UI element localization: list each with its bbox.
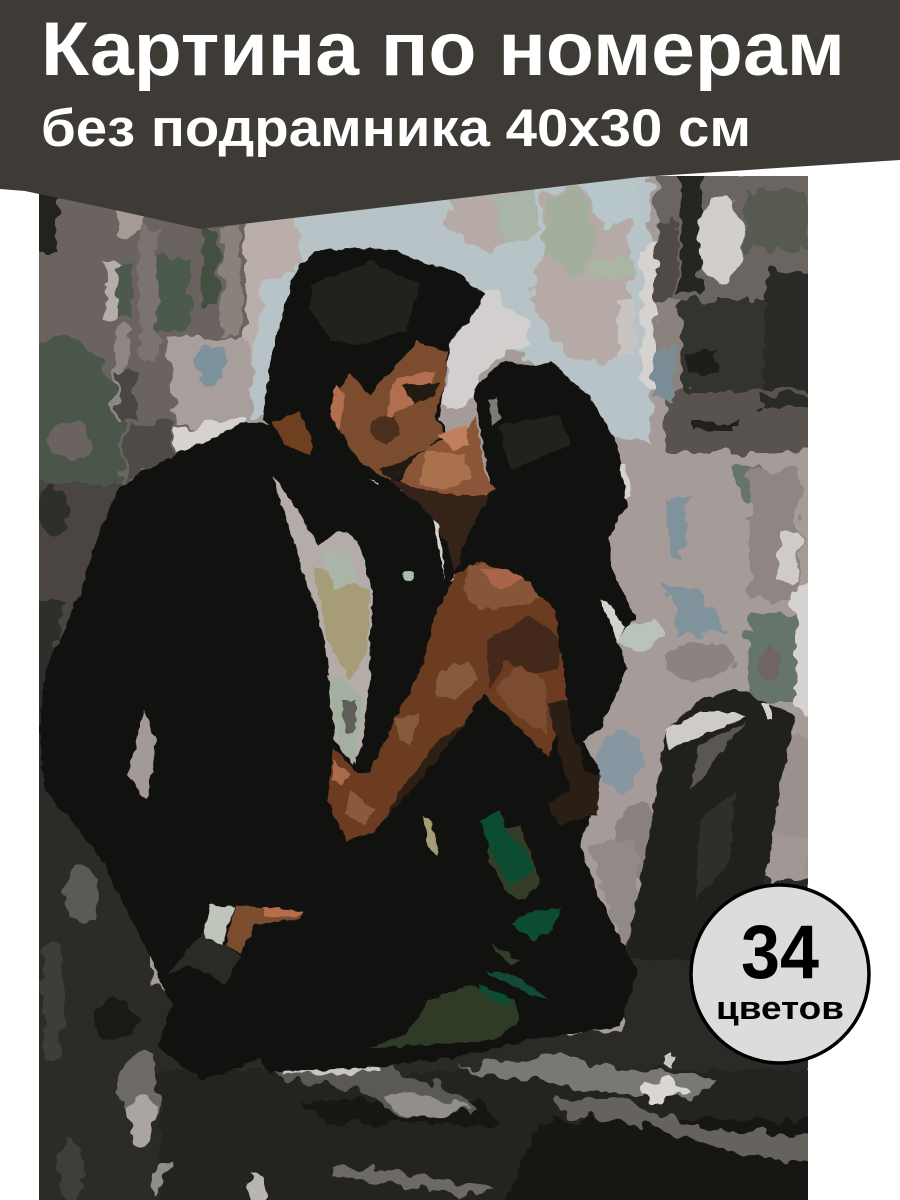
header banner <box>0 0 900 229</box>
painting background: street scene <box>20 160 830 1200</box>
lower right dark ground <box>146 876 808 1200</box>
woman face <box>400 415 495 500</box>
woman: shoulder and arm <box>327 560 600 840</box>
painting: kissing couple paint-by-numbers <box>20 160 830 1200</box>
badge: 34 colours <box>691 885 869 1063</box>
title: Картина по номерам <box>41 7 845 92</box>
light highlights around woman's hair <box>600 465 631 640</box>
right lower haze <box>730 464 764 504</box>
left bottom wall <box>39 758 154 1200</box>
left dark lower wall <box>39 478 124 650</box>
sky <box>250 170 650 445</box>
green dress highlights <box>368 810 560 1048</box>
right wall dark architecture <box>655 170 820 300</box>
woman: hair and face <box>390 362 635 745</box>
woman: dress details <box>368 810 560 1048</box>
left wall <box>39 198 249 485</box>
hand on back <box>547 700 600 825</box>
lapel highlight <box>128 710 156 800</box>
face <box>335 342 447 480</box>
tan fold <box>424 816 438 855</box>
black bag on right <box>625 689 795 960</box>
man: head and hair <box>262 248 485 490</box>
couple silhouette: suit and dress <box>39 422 638 1080</box>
man: hand and cuff <box>167 905 304 985</box>
subtitle: без подрамника 40х30 см <box>41 99 751 158</box>
badge label: цветов <box>716 990 844 1026</box>
badge number: 34 <box>741 910 819 995</box>
white collar strips <box>368 479 379 485</box>
shirt front <box>272 475 372 765</box>
neck <box>273 412 313 455</box>
small dot <box>403 571 413 581</box>
bottom table <box>160 1070 820 1200</box>
